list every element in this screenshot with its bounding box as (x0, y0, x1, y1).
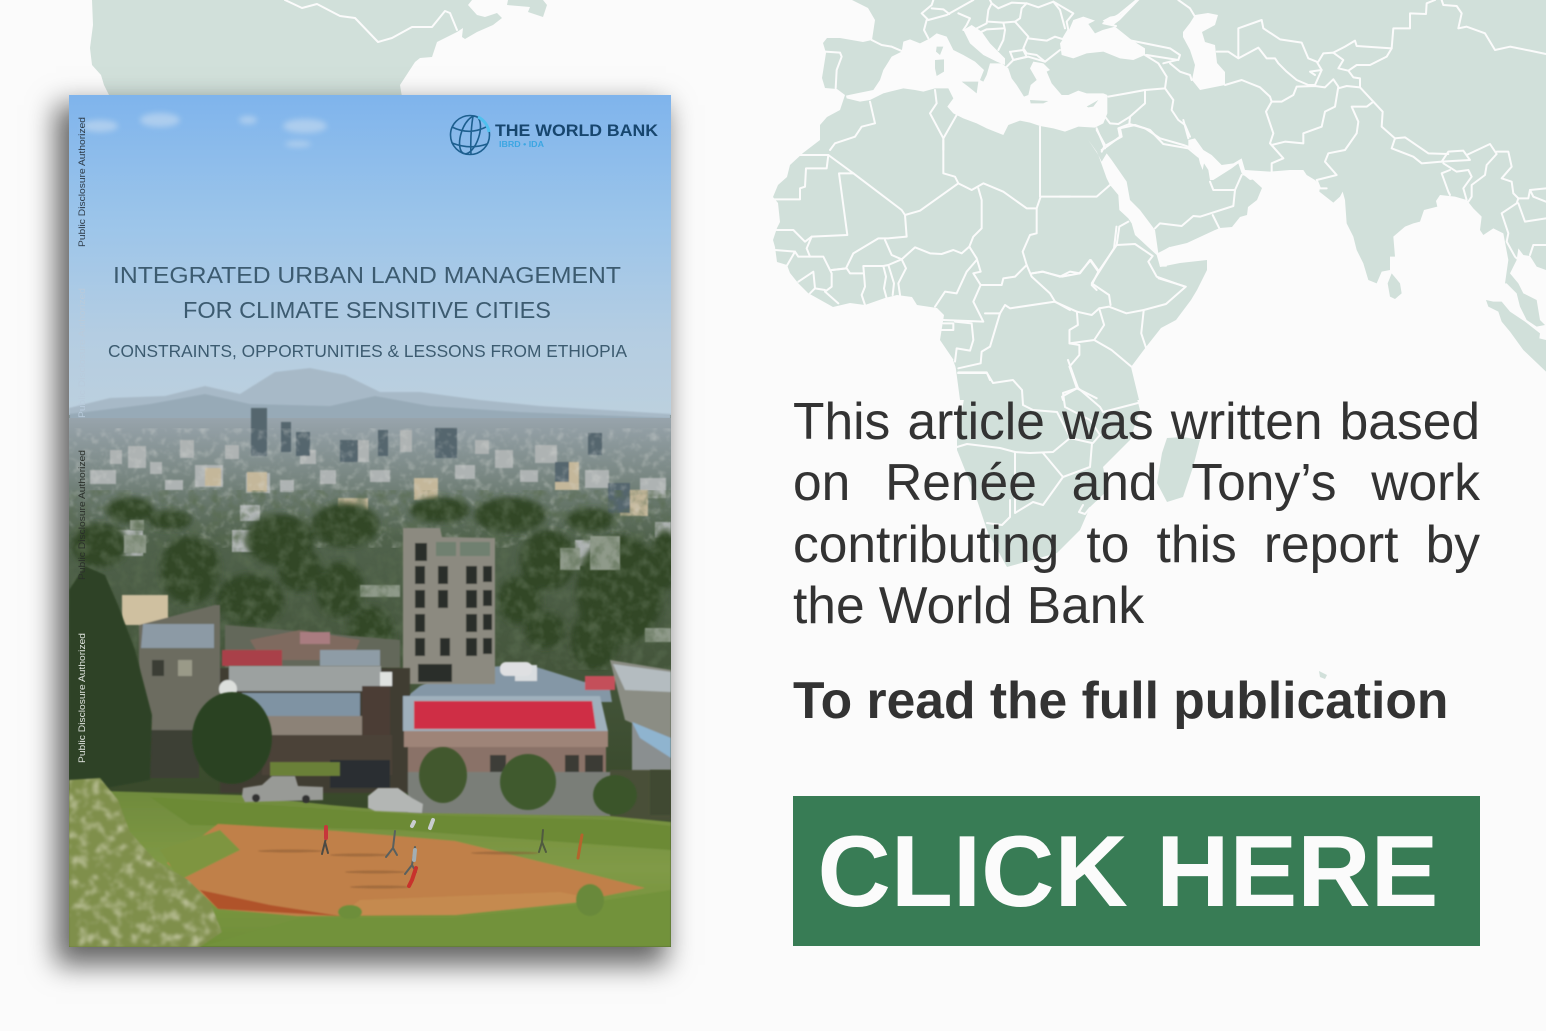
icon: World Bank globe logo (450, 114, 490, 156)
map: Africa, Europe and the Middle East (773, 0, 1300, 400)
text block: article note: contributing to this report by (793, 515, 1480, 573)
map: North America (90, 0, 547, 97)
map: country borders of East Africa (1032, 227, 1186, 400)
text: The World Bank wordmark: THE WORLD BANK (495, 121, 659, 140)
photo: vehicles (242, 776, 423, 813)
cover title: INTEGRATED URBAN LAND MANAGEMENT (113, 262, 621, 288)
button: click here (793, 796, 1480, 946)
photo: tree texture, dark (69, 490, 671, 670)
photo: foreground flowering bush (69, 775, 229, 947)
button: click here: CLICK HERE (818, 814, 1438, 928)
cover: Public Disclosure Authorized side labels: Public Disclosure Authorized (77, 288, 88, 418)
map: Red Sea and Persian Gulf (1088, 138, 1260, 267)
map: Asia (1200, 0, 1546, 372)
cover: Public Disclosure Authorized side labels: Public Disclosure Authorized (77, 450, 88, 580)
map: country borders of West and Central Africa (773, 140, 1070, 380)
map: country borders of Asia (1217, 0, 1546, 258)
photo: city trees (72, 497, 679, 674)
photo: concrete tower (403, 528, 495, 684)
text block: article note: the World Bank (793, 576, 1144, 634)
photo: football players (322, 820, 582, 886)
map: Caspian Sea (1183, 13, 1225, 90)
map: country borders of Europe and North Africa (825, 0, 1197, 150)
cover title (108, 262, 627, 361)
photo: city base (69, 418, 671, 818)
map: southern Africa and Madagascar (953, 360, 1327, 679)
cover: Public Disclosure Authorized side labels: Public Disclosure Authorized (77, 633, 88, 763)
photo: sky (69, 95, 671, 415)
report cover (69, 95, 671, 947)
cover title: FOR CLIMATE SENSITIVE CITIES (183, 297, 551, 323)
map: Mediterranean, Adriatic and Black Sea (846, 0, 1145, 135)
text: The World Bank wordmark (495, 121, 659, 149)
photo: player shadows (258, 850, 539, 888)
photo: foreground buildings (122, 595, 671, 820)
photo: mid-distance buildings (124, 520, 671, 642)
cover: Public Disclosure Authorized side labels (77, 117, 88, 763)
photo: mountains (69, 368, 671, 430)
text block: article note: This article was written based (793, 392, 1480, 450)
photo: red roof house (403, 696, 610, 817)
heading: call to read: To read the full publication (793, 671, 1448, 729)
text block: article note (793, 392, 1480, 634)
text: The World Bank wordmark: IBRD • IDA (499, 140, 544, 149)
photo: clouds (82, 113, 327, 147)
map: country borders of Arabia and the Horn of Africa (1060, 120, 1242, 290)
photo: grass and dirt field (69, 790, 671, 947)
photo: large trees (69, 566, 671, 815)
photo: low rooftops behind tower (222, 625, 671, 790)
photo: city texture, light (69, 428, 671, 548)
cover: Public Disclosure Authorized side labels: Public Disclosure Authorized (77, 117, 88, 247)
text block: article note: on Renée and Tony’s work (793, 453, 1480, 511)
photo: distant city buildings (90, 408, 671, 566)
cover title: CONSTRAINTS, OPPORTUNITIES & LESSONS FROM ETHIOPIA (108, 341, 627, 361)
